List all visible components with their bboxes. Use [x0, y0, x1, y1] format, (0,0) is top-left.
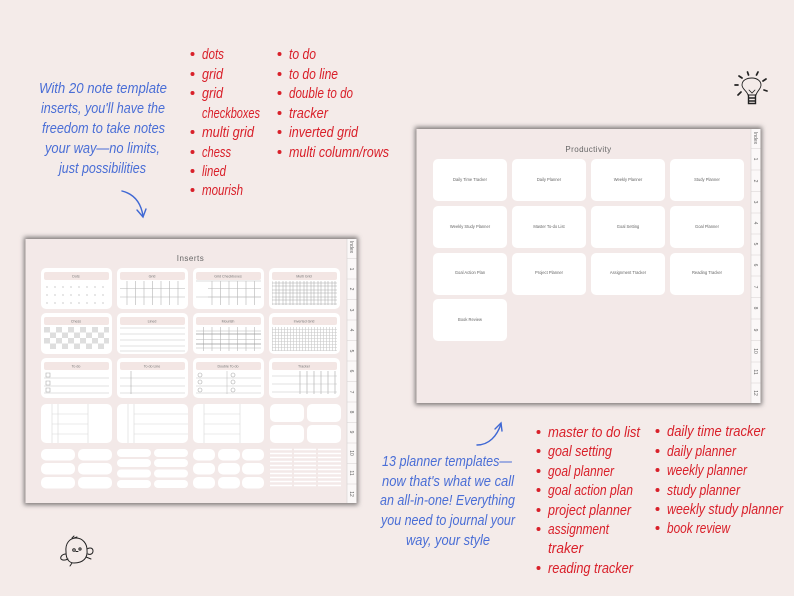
annotation: planner templates: an all-in-one! Everything: [380, 492, 516, 509]
index tabs: 12: [752, 390, 758, 396]
annotation: planner templates: now that's what we call: [382, 473, 515, 490]
list: planner types column two: weekly planner: [667, 462, 748, 479]
index tabs: 5: [348, 350, 354, 353]
list: planner types column two: book review: [667, 520, 731, 537]
index tabs: 2: [752, 180, 758, 183]
annotation: planner templates: way, your style: [406, 532, 490, 549]
cards: planner templates: Master To-do List: [533, 224, 566, 229]
list: planner types column one: traker: [548, 540, 584, 557]
list: planner types column two: study planner: [667, 482, 741, 499]
list: insert types column one: lined: [202, 163, 226, 180]
index tabs: 7: [752, 286, 758, 289]
annotation: note template inserts: With 20 note template: [39, 80, 167, 97]
index tabs: 3: [752, 201, 758, 204]
panel: productivity: [415, 127, 762, 405]
cards: row 3: Tracker: [298, 364, 311, 368]
index tabs: 7: [348, 391, 354, 394]
cards: planner templates: Project Planner: [535, 270, 564, 275]
list: planner types column two: [656, 423, 784, 537]
panel shadow: [24, 237, 358, 505]
annotation: note template inserts: just possibilities: [57, 160, 146, 177]
cards: planner templates: Weekly Planner: [614, 177, 643, 182]
annotation: note template inserts: inserts, you'll have the: [41, 100, 165, 117]
list: insert types column two: tracker: [289, 105, 329, 122]
list: insert types column one: chess: [202, 144, 231, 161]
index tabs: 10: [752, 348, 758, 354]
annotation: planner templates: [380, 453, 516, 549]
index tabs: 8: [752, 307, 758, 310]
list: insert types column one: grid: [202, 85, 224, 102]
list: planner types column one: goal planner: [548, 463, 615, 480]
index tabs: 8: [348, 411, 354, 414]
cards: planner templates: Weekly Study Planner: [450, 224, 491, 229]
index tabs: 4: [348, 329, 354, 332]
annotation: planner templates: you need to journal your: [380, 512, 516, 529]
list: insert types column one: dots: [202, 46, 224, 63]
cards: row 5: [41, 449, 341, 488]
index tabs: 11: [752, 369, 758, 375]
cards: planner templates: Book Review: [458, 317, 482, 322]
cards: planner templates: Goal Action Plan: [455, 270, 486, 275]
index tabs: 2: [348, 288, 354, 291]
index tabs: Index: [752, 132, 758, 145]
cards: row 4: [41, 404, 341, 443]
list: insert types column one: [190, 46, 260, 199]
index tabs: 3: [348, 309, 354, 312]
cards: planner templates: Reading Tracker: [692, 270, 723, 275]
list: insert types column two: double to do: [289, 85, 353, 102]
index tabs: 1: [752, 158, 758, 161]
list: planner types column two: daily time tracker: [667, 423, 766, 440]
panel shadow: [415, 127, 762, 405]
annotation: planner templates: 13 planner templates—: [382, 453, 513, 470]
index tabs: [751, 129, 760, 403]
list: planner types column one: project planner: [547, 502, 632, 519]
list: insert types column one: grid: [202, 66, 224, 83]
cards: row 1: Grid Checkboxes: [214, 274, 242, 278]
cards: row 3: [41, 358, 340, 398]
list: planner types column one: goal action plan: [548, 482, 633, 499]
cards: planner templates: [433, 159, 744, 341]
cards: row 1: Dots: [72, 274, 80, 278]
index tabs: 1: [348, 268, 354, 271]
list: planner types column one: assignment: [548, 521, 610, 538]
list: insert types column two: inverted grid: [289, 124, 359, 141]
list: insert types column two: [278, 46, 389, 161]
cards: row 3: Double To do: [217, 364, 239, 368]
index tabs: 9: [348, 431, 354, 434]
cards: row 2: Chess: [71, 320, 81, 324]
list: insert types column two: to do line: [289, 66, 338, 83]
cards: row 3: To do Line: [144, 364, 160, 368]
cards: row 1: Grid: [149, 274, 155, 278]
index tabs: [347, 239, 356, 503]
icon: chick doodle: [61, 536, 93, 566]
cards: planner templates: Goal Setting: [617, 224, 640, 229]
index tabs: 5: [752, 243, 758, 246]
list: insert types column one: checkboxes: [202, 105, 260, 122]
panel: inserts: [24, 237, 358, 505]
heading: inserts: Inserts: [177, 254, 204, 263]
list: insert types column one: mourish: [202, 182, 243, 199]
cards: row 2: [41, 313, 340, 354]
cards: planner templates: Assignment Tracker: [610, 270, 647, 275]
cards: planner templates: Daily Planner: [537, 177, 562, 182]
icon: light bulb: [735, 72, 767, 104]
cards: row 1: [41, 268, 340, 309]
list: insert types column two: to do: [289, 46, 316, 63]
list: planner types column one: goal setting: [548, 443, 613, 460]
cards: planner templates: Study Planner: [694, 177, 720, 182]
cards: row 1: Multi Grid: [296, 274, 312, 278]
cards: planner templates: Goal Planner: [695, 224, 720, 229]
index tabs: Index: [348, 241, 354, 254]
cards: row 2: Inverted Grid: [294, 320, 314, 324]
index tabs: 11: [348, 470, 354, 476]
list: planner types column two: daily planner: [667, 443, 737, 460]
heading: productivity: Productivity: [565, 145, 612, 154]
arrow: up to productivity panel: [477, 423, 502, 445]
cards: row 2: Mourish: [222, 320, 234, 324]
index tabs: 12: [348, 491, 354, 497]
index tabs: 6: [752, 264, 758, 267]
arrow: down to inserts panel: [122, 191, 146, 217]
cards: row 2: Lined: [148, 320, 156, 324]
list: planner types column one: [536, 424, 641, 577]
list: planner types column one: reading tracker: [548, 560, 634, 577]
index tabs: 6: [348, 370, 354, 373]
annotation: note template inserts: your way—no limits,: [44, 140, 160, 157]
annotation: note template inserts: freedom to take notes: [42, 120, 165, 137]
annotation: note template inserts: [39, 80, 167, 177]
cards: row 3: To do: [72, 364, 80, 368]
cards: planner templates: Daily Time Tracker: [453, 177, 488, 182]
list: planner types column one: master to do list: [548, 424, 641, 441]
index tabs: 4: [752, 222, 758, 225]
list: insert types column two: multi column/rows: [289, 144, 389, 161]
list: insert types column one: multi grid: [202, 124, 255, 141]
index tabs: 9: [752, 329, 758, 332]
index tabs: 10: [348, 450, 354, 456]
